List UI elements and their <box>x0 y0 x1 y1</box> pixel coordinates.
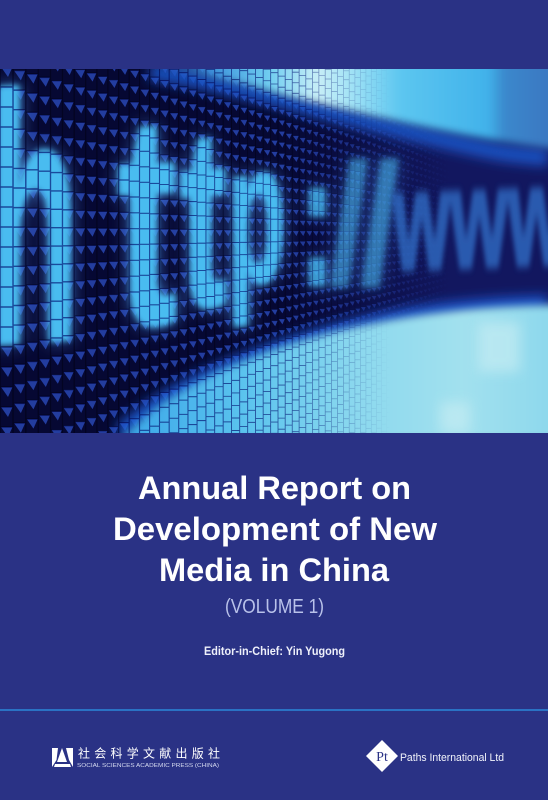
title: Media in China <box>159 552 389 588</box>
title: Annual Report on <box>138 470 411 506</box>
panel: photo of illuminated http address display <box>0 69 548 433</box>
lit letters http:// on the display <box>0 73 406 358</box>
lit letters http:// on the display: p <box>228 99 285 328</box>
publisher Chinese name: 社会科学文献出版社 <box>78 746 220 760</box>
lit letters http:// on the display: / <box>330 130 368 319</box>
divider <box>0 709 548 711</box>
lit letters http:// on the display: / <box>361 130 399 319</box>
icon: white diamond with Pt: Pt <box>376 750 388 765</box>
company name: Paths International Ltd <box>400 752 504 764</box>
bright lower right area <box>120 305 548 440</box>
lit letters http:// on the display: t <box>180 73 227 362</box>
lit letters http:// on the display: : <box>300 114 335 326</box>
dark display base <box>0 69 435 433</box>
publisher logo: Paths International <box>366 740 504 772</box>
bright upper right area <box>167 69 548 153</box>
publisher English name: SOCIAL SCIENCES ACADEMIC PRESS (CHINA) <box>77 763 219 769</box>
lit letters http:// on the display: t <box>117 52 177 389</box>
title <box>113 470 437 588</box>
volume label: (VOLUME 1) <box>225 596 324 618</box>
icon: press emblem <box>52 748 73 767</box>
editor line: Editor-in-Chief: Yin Yugong <box>204 646 345 658</box>
grid gaps between studs <box>0 69 384 433</box>
glow along upper screen edge <box>150 72 548 158</box>
publisher logo: Social Sciences Academic Press <box>52 746 220 769</box>
title: Development of New <box>113 511 437 547</box>
dark band fading to the right <box>300 116 548 326</box>
glow along lower screen edge <box>120 303 548 433</box>
light patches in lower area <box>440 322 520 433</box>
pyramid studs <box>1 69 438 433</box>
